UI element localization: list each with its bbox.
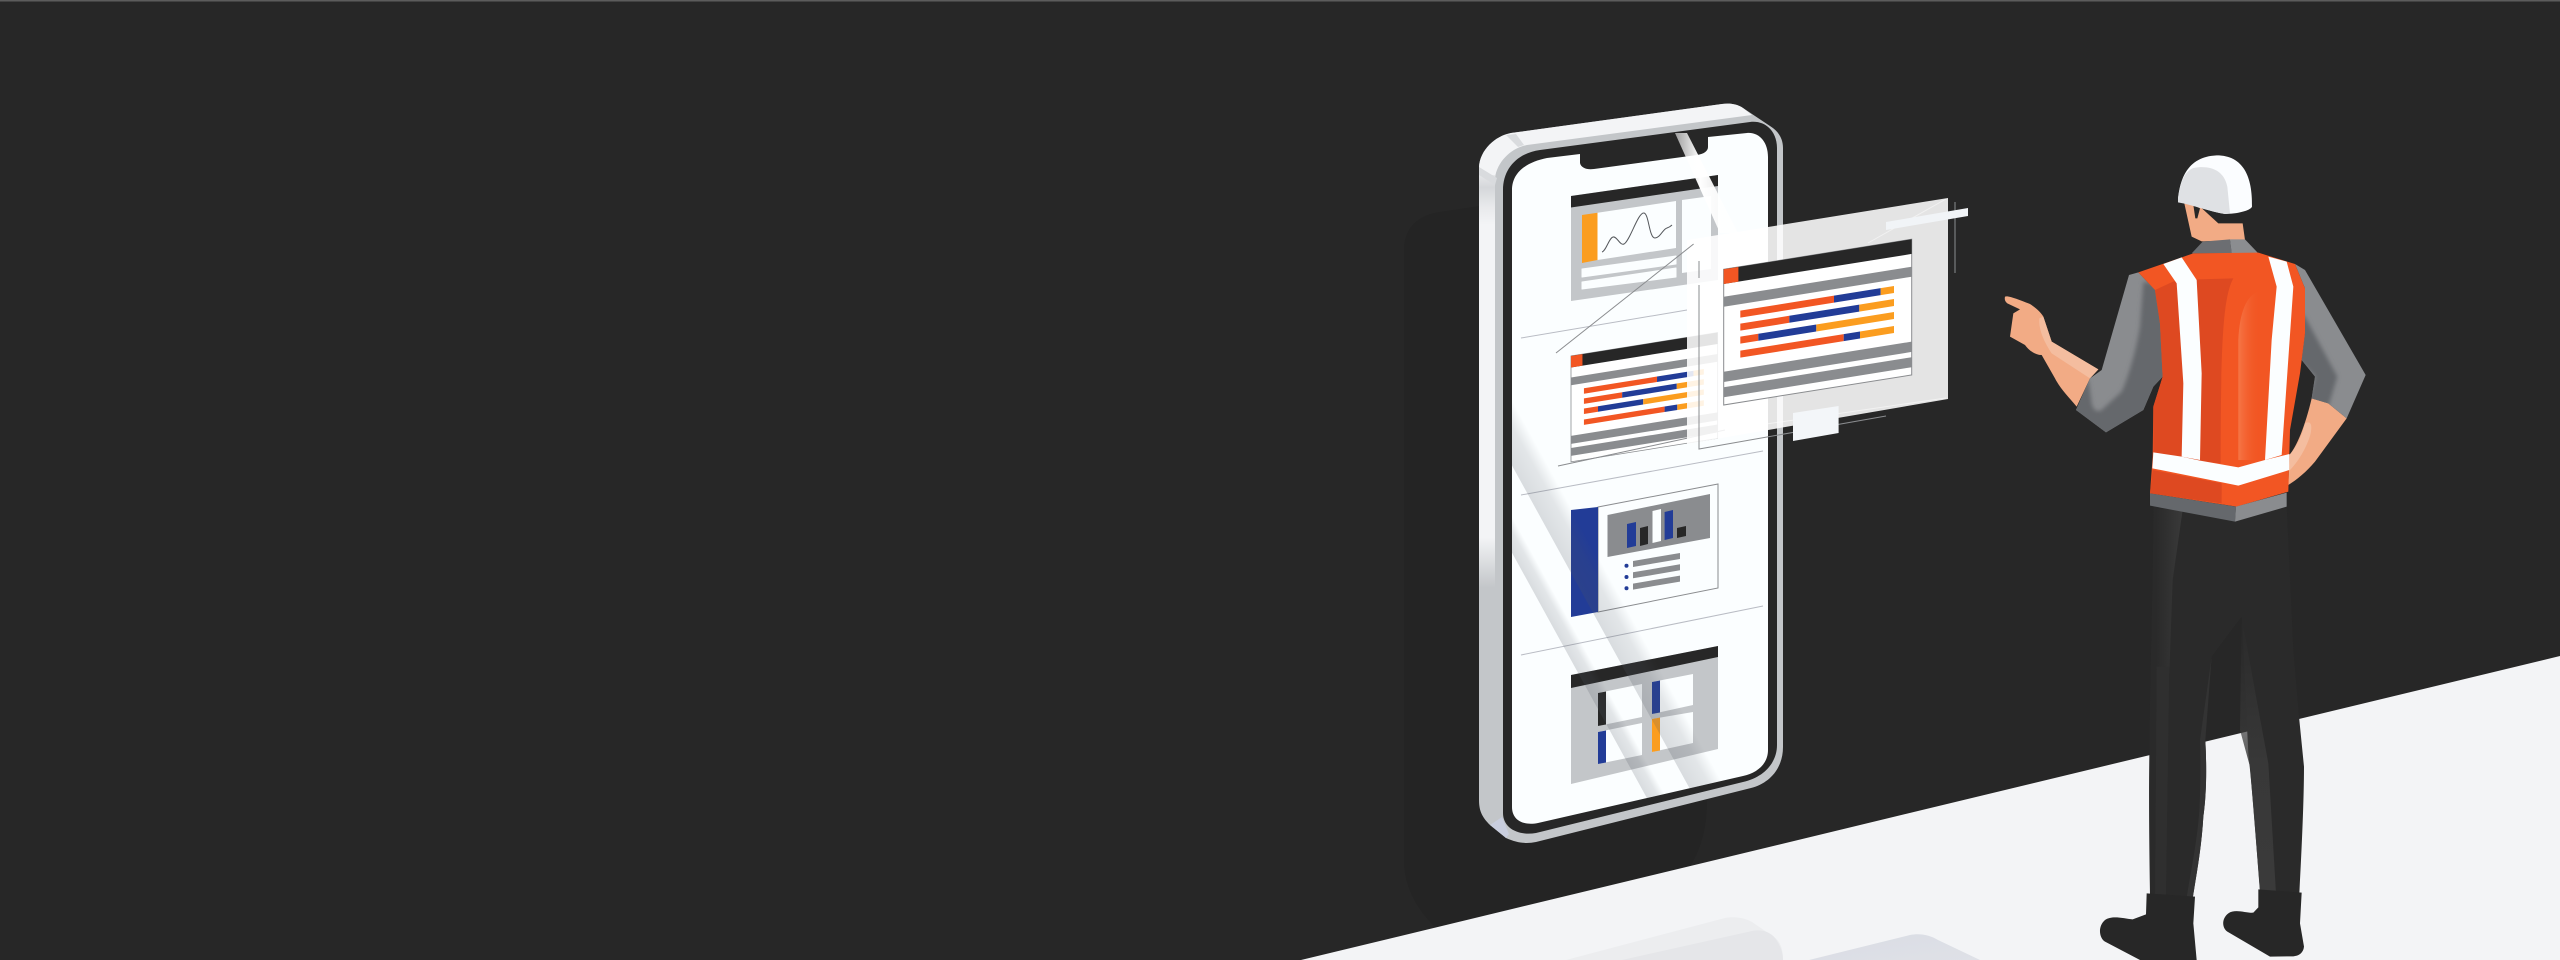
- arm highlight: [2039, 317, 2098, 378]
- right boot: [2223, 889, 2304, 957]
- worker legs: [2100, 505, 2304, 960]
- light beams on screen: [1512, 410, 1717, 798]
- card: grid tiles: [1571, 646, 1718, 784]
- hard hat: [2178, 155, 2252, 214]
- trouser highlight right leg: [2240, 617, 2276, 893]
- left sleeve: [2076, 272, 2163, 432]
- worker upper body: [2005, 155, 2366, 522]
- phone left bevel: [1479, 175, 1495, 800]
- light streak over notch: [1675, 133, 1738, 233]
- card: line chart: [1571, 175, 1718, 301]
- phone: [1479, 104, 1783, 843]
- phone top bevel: [1479, 104, 1752, 185]
- left boot: [2100, 893, 2197, 960]
- pointing arm: [2005, 296, 2098, 407]
- phone body: [1479, 104, 1783, 843]
- reflective stripes: [2152, 257, 2293, 486]
- neck and head: [2184, 203, 2245, 241]
- card: presentation with bar chart: [1571, 484, 1718, 617]
- vest body: [2138, 253, 2305, 507]
- floor: [1301, 656, 2560, 960]
- left sleeve shadow: [2076, 280, 2162, 432]
- phone corner facet: [1490, 817, 1509, 838]
- phone screen: [1512, 133, 1768, 824]
- trouser inner shade left leg: [2187, 657, 2212, 898]
- translucent projected panel: [1687, 198, 1948, 444]
- projected table enlarged: [1724, 239, 1912, 405]
- vest shading: [2153, 278, 2233, 463]
- trouser highlight left leg lower: [2155, 667, 2169, 897]
- floor reflections: [1566, 917, 1980, 960]
- right sleeve: [2295, 264, 2366, 418]
- trousers: [2149, 505, 2304, 898]
- phone bezel: [1503, 122, 1777, 834]
- vest hem: [2150, 493, 2287, 522]
- screen dividers: [1521, 310, 1763, 655]
- vest highlight: [2238, 292, 2260, 460]
- resting arm: [2288, 398, 2347, 485]
- collar: [2192, 239, 2258, 253]
- phone shadow on wall: [1404, 172, 1707, 935]
- right sleeve shadow: [2302, 316, 2338, 404]
- trouser highlight left leg upper: [2156, 508, 2183, 673]
- card: table small: [1571, 332, 1718, 462]
- construction lines and accents: [1556, 199, 1968, 449]
